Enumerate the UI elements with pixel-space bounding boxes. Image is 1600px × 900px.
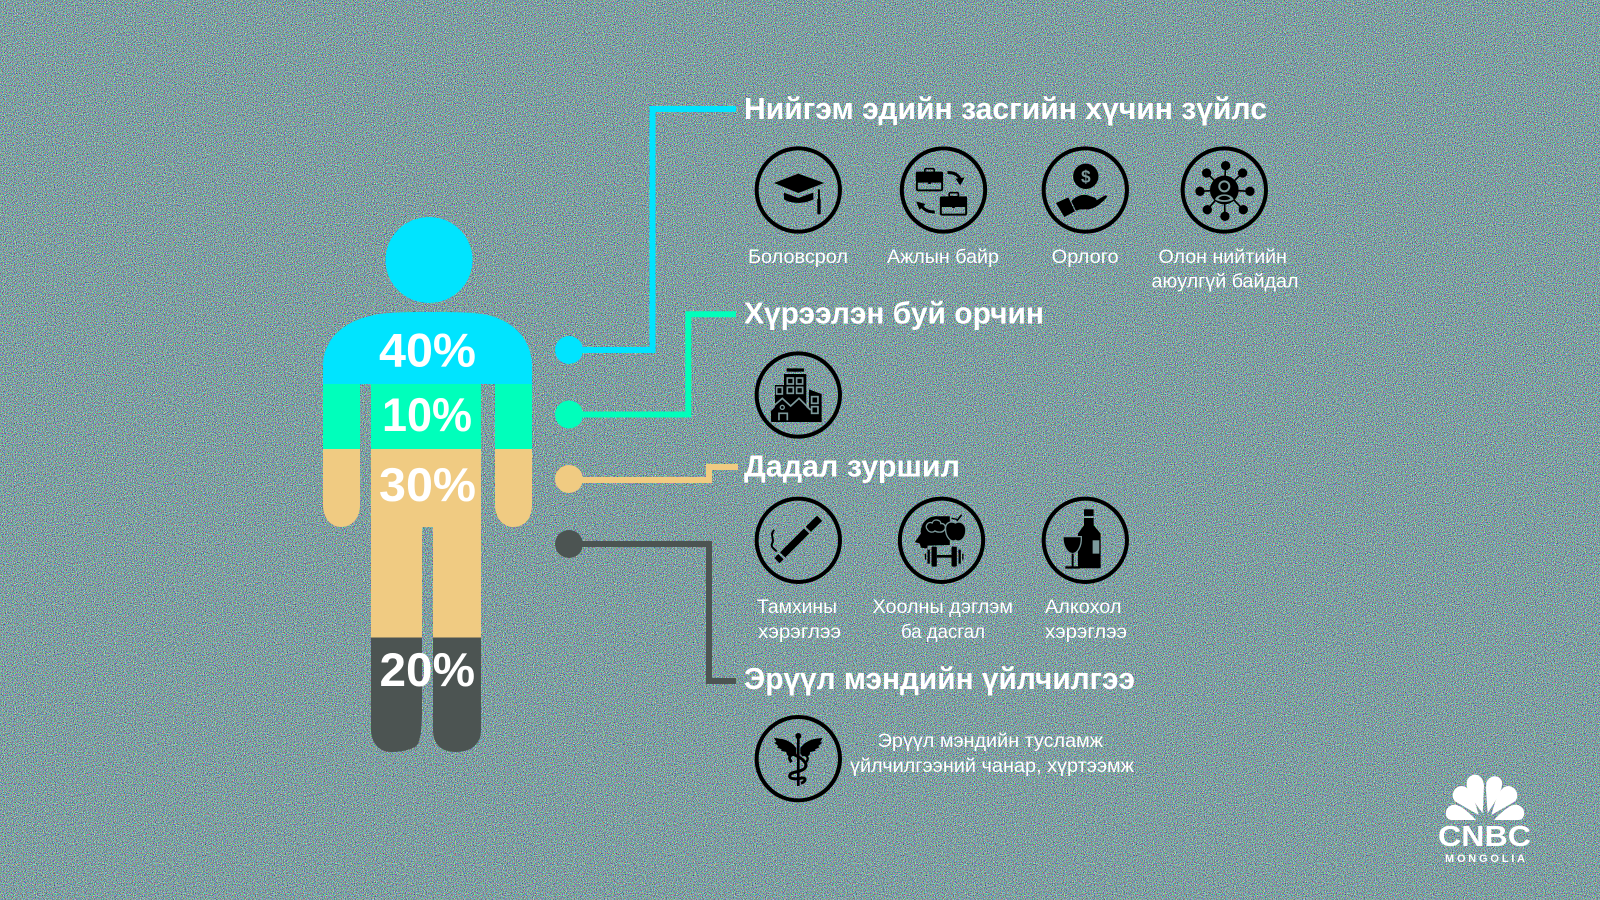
icon: education xyxy=(757,148,840,232)
label: alcohol: Алкохол xyxy=(1045,596,1122,618)
percentage 20%: 20% xyxy=(380,643,475,696)
label: health services xyxy=(850,730,1134,777)
label: diet and exercise: Хоолны дэглэм xyxy=(872,596,1013,618)
label: diet and exercise: ба дасгал xyxy=(901,621,985,643)
label: diet and exercise xyxy=(872,596,1013,643)
label: smoking xyxy=(757,596,841,643)
percentage 30%: 30% xyxy=(379,458,476,511)
human figure chart xyxy=(323,217,532,752)
label: income: Орлого xyxy=(1052,246,1119,268)
heading: behaviour: Дадал зуршил xyxy=(744,448,960,484)
icon: diet and exercise xyxy=(900,499,983,582)
label: health services: үйлчилгээний чанар, хүртээмж xyxy=(850,755,1134,777)
heading: environment: Хүрээлэн буй орчин xyxy=(744,296,1044,330)
label: alcohol: хэрэглээ xyxy=(1045,621,1127,643)
logo: CNBC Mongolia xyxy=(1438,775,1531,865)
segment: 30% behaviour xyxy=(323,449,532,638)
percentage 10%: 10% xyxy=(382,388,472,441)
icon: buildings xyxy=(757,353,840,437)
logo wordmark: CNBC xyxy=(1438,821,1531,853)
icon: cigarette xyxy=(757,499,840,582)
icon: public safety xyxy=(1183,148,1266,232)
head xyxy=(386,217,472,303)
label: smoking: хэрэглээ xyxy=(758,621,841,643)
icon: jobs xyxy=(902,148,985,232)
segment: 10% environment xyxy=(323,384,532,449)
icon: income xyxy=(1044,148,1127,232)
segment: 20% health care xyxy=(371,638,481,752)
heading: socio-economic: Нийгэм эдийн засгийн хүчин зүйлс xyxy=(744,91,1267,126)
connector: dark xyxy=(555,530,736,681)
icon: caduceus xyxy=(757,717,840,800)
heading: health services: Эрүүл мэндийн үйлчилгээ xyxy=(744,661,1135,696)
connector: cyan xyxy=(555,109,736,364)
icon: alcohol xyxy=(1044,499,1127,582)
icon: income: $ xyxy=(1081,166,1091,186)
label: health services: Эрүүл мэндийн тусламж xyxy=(878,730,1103,752)
label: jobs: Ажлын байр xyxy=(887,246,999,268)
percentage 40%: 40% xyxy=(379,324,476,376)
label: public safety: аюулгүй байдал xyxy=(1152,271,1298,293)
label: education: Боловсрол xyxy=(748,246,848,268)
label: public safety: Олон нийтийн xyxy=(1158,246,1287,268)
label: smoking: Тамхины xyxy=(757,596,837,618)
logo sub-brand: MONGOLIA xyxy=(1445,853,1525,865)
logo feathers xyxy=(1446,775,1524,820)
label: alcohol xyxy=(1045,596,1127,643)
segment: 40% socio-economic xyxy=(323,312,532,384)
label: public safety xyxy=(1152,246,1298,293)
connector: green xyxy=(555,314,736,428)
connector: tan xyxy=(555,465,738,493)
